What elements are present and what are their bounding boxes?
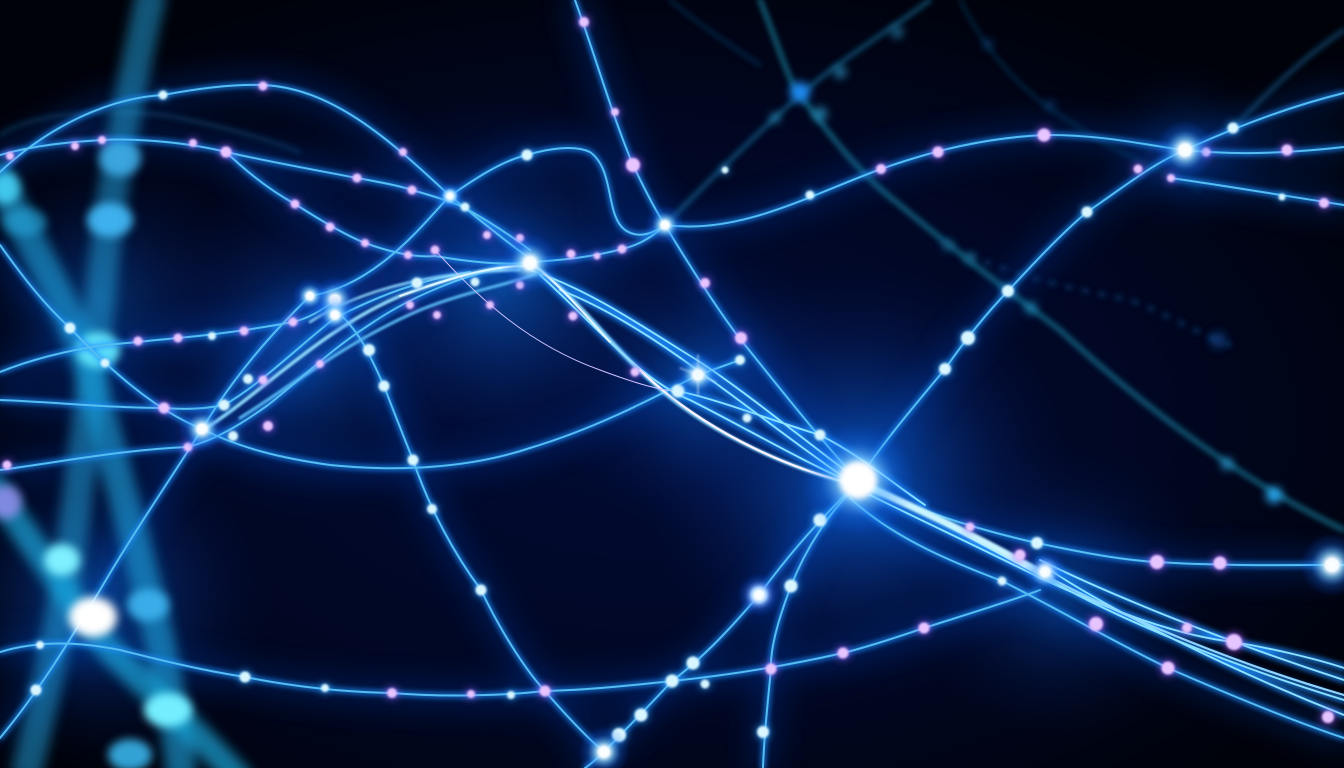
node glow: blue — [30, 90, 1286, 742]
nodes: blue — [30, 90, 1286, 742]
bright fibre bundles — [530, 270, 1344, 715]
blurred foreground light bands — [0, 0, 245, 768]
bright bundle highlight — [200, 250, 1344, 695]
starburst rays at small junction — [680, 355, 716, 395]
blurred teal background strands — [0, 0, 1344, 530]
